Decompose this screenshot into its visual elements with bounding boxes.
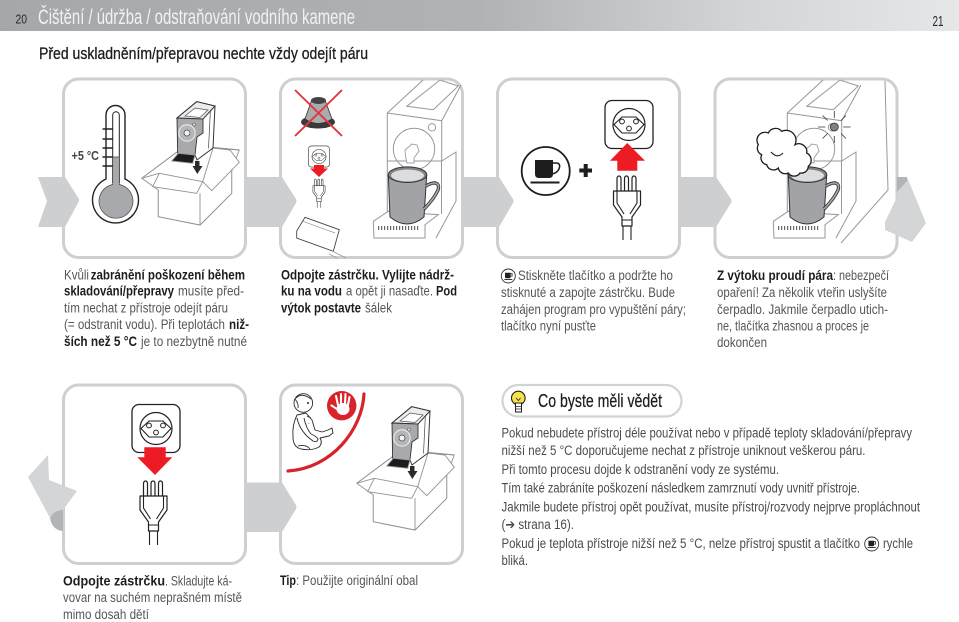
step 1 text: zabránění poškození během (91, 268, 245, 282)
icon: socket bottom (132, 404, 180, 452)
callout body text: Pokud je teplota přístroje nižší než 5 °C, nelze přístroj spustit a tlačítko (502, 536, 860, 551)
panel: unplug, empty tank, cup (280, 79, 462, 258)
panel: unplug (64, 385, 246, 564)
step 4 text: ne, tlačítka zhasnou a proces je (717, 318, 869, 334)
icon: crossed capsule (295, 90, 342, 136)
step 1 text: (= odstranit vodu). Při teplotách (64, 317, 225, 332)
icon: plug bottom (140, 481, 167, 545)
panel: steam from spout (715, 79, 897, 258)
step 4 text (717, 268, 889, 350)
step 4 text: opaření! Za několik vteřin uslyšíte (717, 285, 887, 300)
arrow: curl right (885, 177, 926, 242)
icon: socket (605, 100, 653, 148)
step 2 text: Pod (436, 284, 457, 298)
step 2 text: a opět ji nasaďte. (346, 284, 433, 298)
page number 21: 21 (932, 14, 944, 30)
icon: blinking light (818, 111, 850, 143)
caption: unplug: Odpojte zástrčku (63, 574, 165, 588)
step 1 text: ších než 5 °C (64, 334, 137, 349)
step 1 text: skladování/přepravy (64, 284, 174, 298)
icon: light bulb (512, 391, 525, 412)
panel: press button and plug in (498, 79, 680, 258)
arrow: curl left continuation (28, 455, 77, 531)
callout body text (502, 426, 920, 568)
icon: small plug (313, 179, 325, 208)
callout body text: rychle (883, 536, 913, 551)
icon: thermometer (72, 106, 138, 223)
step 1 text: niž- (229, 317, 249, 332)
caption: unplug (63, 574, 242, 622)
arrow: step 2 to 3 (463, 177, 514, 227)
step 1 text: Kvůli (64, 268, 89, 282)
step 3 text (501, 268, 686, 334)
icon: machine over box, bottom (357, 407, 454, 530)
step 3 text: Stiskněte tlačítko a podržte ho (518, 268, 673, 283)
icon: red arrow up (610, 143, 645, 171)
arrow: step 1 to 2 (246, 177, 296, 227)
caption: tip: Tip (280, 573, 296, 588)
step 1 text: je to nezbytně nutné (140, 334, 247, 349)
header title: Čištění / údržba / odstraňování vodního kamene (38, 6, 355, 29)
machine right edge (841, 81, 888, 243)
icon: red arrow down (137, 447, 172, 475)
icon: steam cloud (757, 128, 811, 176)
header band (0, 0, 959, 31)
callout body text: (➔ strana 16). (502, 517, 574, 532)
step 3 text: stisknuté a zapojte zástrčku. Bude (501, 285, 675, 300)
arrow: start (38, 177, 79, 227)
caption: tip: : Použijte originální obal (296, 573, 418, 588)
subtitle: Před uskladněním/přepravou nechte vždy odejít páru (39, 44, 368, 63)
step 1 text: tím nechat z přístroje odejít páru (64, 300, 228, 316)
step 4 text: dokončen (717, 335, 767, 350)
icon: machine with cup and steam (773, 80, 861, 238)
icon: inline coffee button (501, 269, 515, 283)
step 1 text (64, 268, 249, 349)
label: +5 °C: +5 °C (72, 149, 99, 163)
step 2 text (281, 268, 457, 316)
icon: water tank (297, 217, 346, 258)
step 3 text: tlačítko nyní pusťte (501, 318, 596, 334)
icon: stop hand (327, 391, 356, 420)
icon: machine over box (142, 102, 239, 225)
icon: small socket (308, 146, 330, 167)
step 4 text: čerpadlo. Jakmile čerpadlo utich- (717, 302, 888, 317)
safety arc (288, 394, 364, 471)
arrow: step 3 to 4 (680, 177, 732, 227)
page number 20: 20 (16, 12, 27, 26)
callout body text: Při tomto procesu dojde k odstranění vody ze systému. (502, 462, 779, 477)
step 1 text: musíte před- (178, 284, 244, 298)
icon: machine with cup (373, 80, 461, 238)
step 4 text: Z výtoku proudí pára (717, 268, 833, 283)
step 2 text: ku na vodu (281, 284, 342, 298)
heading text: Co byste měli vědět (538, 391, 662, 411)
caption: unplug: mimo dosah dětí (63, 607, 149, 622)
icon: coffee button (522, 147, 570, 195)
step 2 text: šálek (365, 300, 392, 316)
icon: baby (293, 394, 333, 450)
callout body text: nižší než 5 °C doporučujeme nechat z přístroje uniknout veškerou páru. (502, 443, 866, 458)
callout body text: bliká. (502, 553, 528, 568)
step 2 text: Odpojte zástrčku. Vylijte nádrž- (281, 268, 454, 282)
icon: inline coffee button (865, 537, 879, 551)
callout heading pill (502, 385, 682, 416)
icon: plus (579, 164, 592, 177)
panel: thermometer and box (64, 79, 246, 258)
step 2 text: výtok postavte (281, 300, 361, 316)
icon: plug (614, 176, 640, 240)
caption: unplug: vovar na suchém neprašném místě (63, 590, 242, 605)
step 4 text: : nebezpečí (833, 268, 889, 283)
panel: tip original packaging (280, 385, 462, 564)
caption: unplug: . Skladujte ká- (165, 574, 232, 588)
icon: small red arrow (310, 165, 328, 177)
arrow: bottom step (246, 482, 296, 532)
callout body text: Tím také zabráníte poškození následkem zamrznutí vody uvnitř přístroje. (502, 480, 860, 496)
step 3 text: zahájen program pro vypuštění páry; (501, 302, 686, 317)
